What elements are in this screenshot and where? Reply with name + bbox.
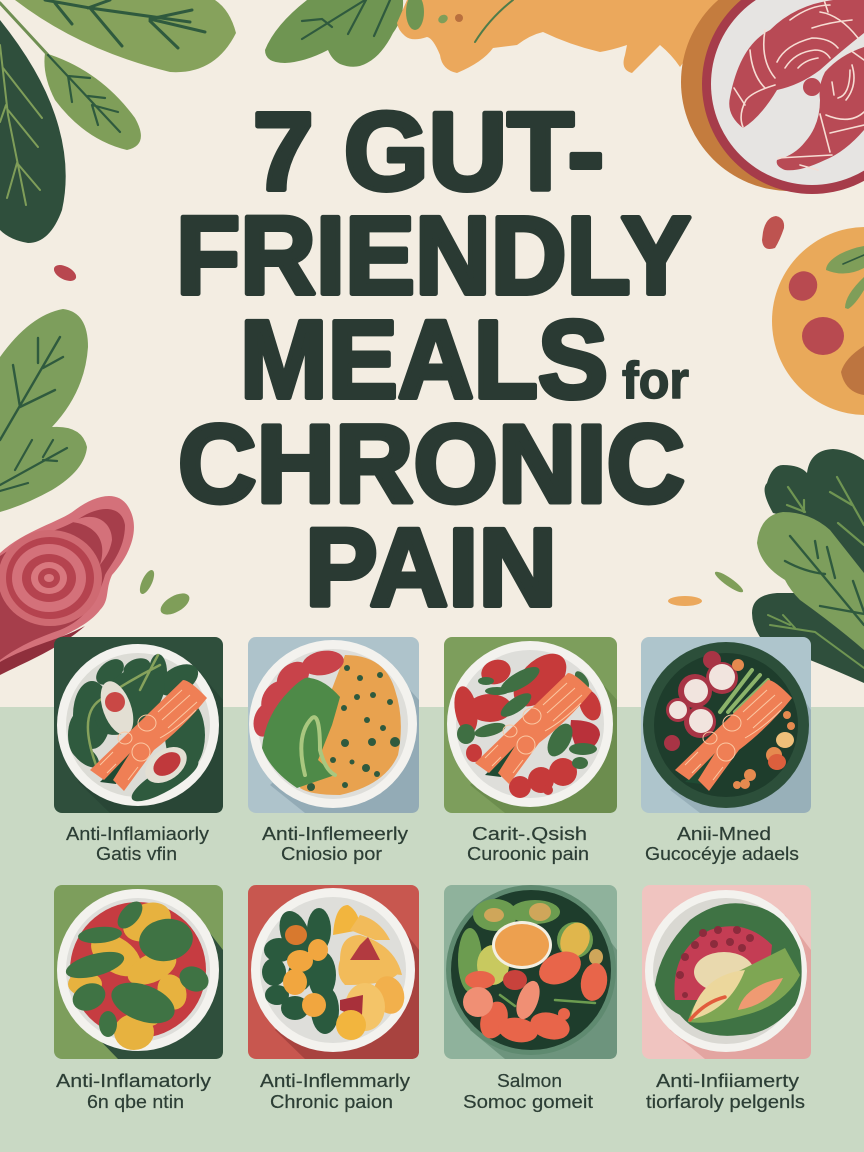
decoration: salmon steak plate xyxy=(681,0,864,194)
decoration: left leaves xyxy=(0,309,88,512)
title line 4: CHRONIC xyxy=(178,403,685,526)
decoration: orange seed right xyxy=(668,596,702,606)
caption: meal 6: Chronic paion xyxy=(270,1091,393,1112)
caption: meal 4 xyxy=(645,823,799,864)
caption: meal 7: Salmon xyxy=(497,1070,562,1091)
decoration: top left leaves xyxy=(0,0,236,243)
caption: meal 3 xyxy=(467,823,589,864)
decoration: right leaves xyxy=(752,449,864,683)
title line 5: PAIN xyxy=(305,506,557,630)
caption: meal 6: Anti-Inflemmarly xyxy=(260,1070,411,1091)
caption: meal 8: tiorfaroly pelgenls xyxy=(646,1091,805,1112)
panel: meal 8 xyxy=(642,885,811,1059)
panel: meal 6 xyxy=(248,885,419,1059)
caption: meal 5 xyxy=(56,1070,212,1112)
caption: meal 5: 6n qbe ntin xyxy=(87,1091,184,1112)
caption: meal 8: Anti-Infiiamerty xyxy=(656,1070,800,1091)
decoration: pizza circle xyxy=(772,227,864,415)
decoration: top centre leaf xyxy=(265,0,403,67)
title line 3: MEALS xyxy=(240,298,608,422)
panel: meal 7 xyxy=(444,885,617,1059)
panel: meal 3 xyxy=(444,637,617,813)
caption: meal 2 xyxy=(262,823,409,864)
decoration: orange splash xyxy=(397,0,740,73)
caption: meal 6 xyxy=(260,1070,411,1112)
caption: meal 4: Gucocéyje adaels xyxy=(645,843,799,864)
decoration: beet slice xyxy=(0,496,134,675)
caption: meal 5: Anti-Inflamatorly xyxy=(56,1070,212,1091)
caption: meal 1: Gatis vfin xyxy=(96,843,177,864)
decoration: red seed left xyxy=(51,262,79,284)
caption: meal 8 xyxy=(646,1070,805,1112)
decoration: red bean xyxy=(762,216,784,249)
caption: meal 3: Carit-.Qsish xyxy=(472,823,587,844)
panel: meal 2 xyxy=(248,637,419,813)
panel: meal 5 xyxy=(54,885,223,1059)
caption: meal 1: Anti-Inflamiaorly xyxy=(66,823,210,844)
title line 2: FRIENDLY xyxy=(176,194,691,318)
captions xyxy=(56,823,805,1112)
caption: meal 3: Curoonic pain xyxy=(467,843,589,864)
caption: meal 4: Anii-Mned xyxy=(677,823,771,844)
panel: meal 4 xyxy=(641,637,811,813)
title word for: for xyxy=(622,352,689,410)
caption: meal 2: Anti-Inflemeerly xyxy=(262,823,409,844)
background green band xyxy=(0,707,864,1152)
caption: meal 7 xyxy=(463,1070,593,1112)
panel: meal 1 xyxy=(54,637,223,813)
caption: meal 7: Somoc gomeit xyxy=(463,1091,593,1112)
caption: meal 1 xyxy=(66,823,210,864)
caption: meal 2: Cniosio por xyxy=(281,843,382,864)
background cream xyxy=(0,0,864,707)
main title xyxy=(176,90,691,630)
title line 1: 7 GUT- xyxy=(253,90,604,214)
decoration: small green seeds xyxy=(137,568,745,619)
